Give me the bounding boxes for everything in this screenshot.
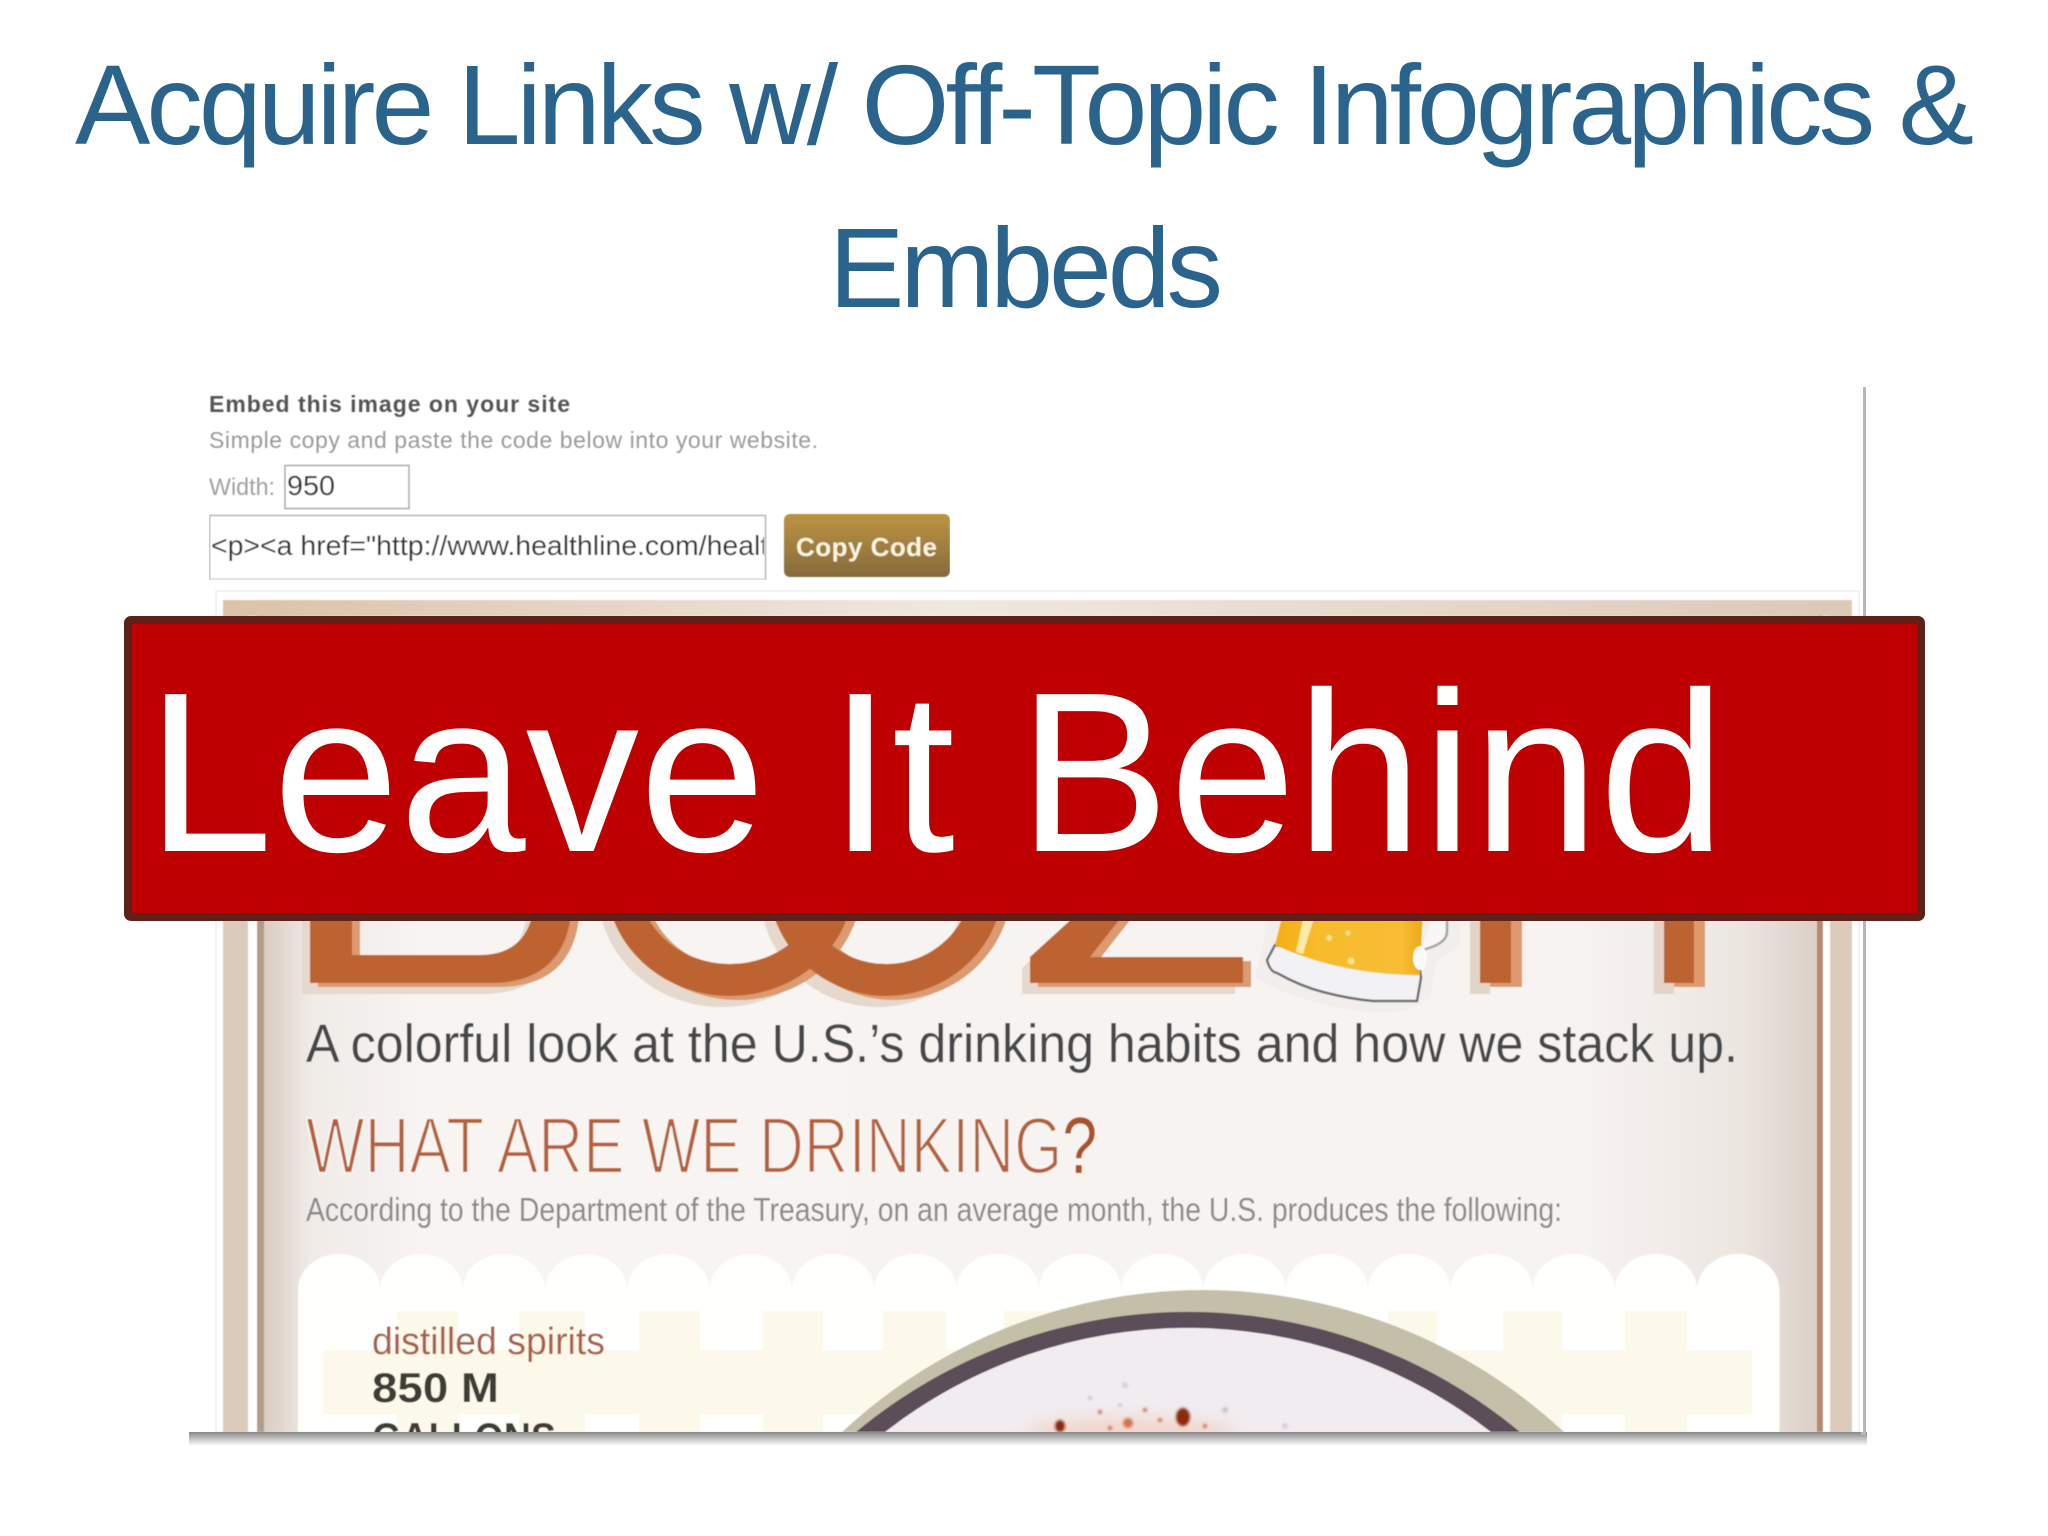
- stat value: 850 M: [372, 1364, 499, 1411]
- right edge shadow: [1861, 387, 1866, 1435]
- button shape: [784, 514, 950, 577]
- banner: leave it behind: [128, 620, 1921, 917]
- foam: [885, 1328, 1491, 1432]
- width input: [285, 466, 409, 508]
- infographic preview: [216, 590, 1860, 1461]
- section heading: WHAT ARE WE DRINKING?: [306, 1101, 1097, 1190]
- input value: 950: [287, 470, 335, 501]
- mug halo: [1255, 915, 1460, 1012]
- beer highlight: [1296, 905, 1318, 954]
- banner text: Leave It Behind: [146, 646, 1726, 900]
- icon: beer mug: [1255, 905, 1460, 1012]
- subtitle: A colorful look at the U.S.’s drinking habits and how we stack up.: [306, 1014, 1738, 1074]
- post fills: [1480, 900, 1694, 983]
- code text: <p><a href="http://www.healthline.com/health/: [211, 530, 792, 561]
- preview paper: [264, 616, 1817, 1432]
- left inner rule: [257, 616, 264, 1432]
- beige offset shadow: [302, 791, 1235, 994]
- panel shadow: [189, 387, 1867, 1446]
- banner box: [128, 620, 1921, 917]
- foam stain: [1025, 1418, 1235, 1446]
- code field: [210, 516, 766, 580]
- preview frame: [216, 590, 1860, 1432]
- outer tan border: [223, 600, 1852, 1432]
- plaid pattern: [323, 1311, 1752, 1432]
- top band: [223, 600, 1580, 616]
- stat label: distilled spirits: [372, 1321, 605, 1363]
- light orange offset: [318, 784, 1251, 987]
- title: [75, 42, 1974, 331]
- bottom shadow: [189, 1432, 1867, 1446]
- beer: [1275, 905, 1423, 975]
- foam specks: [1055, 1382, 1288, 1432]
- embed instruction: Simple copy and paste the code below into your website.: [209, 427, 818, 453]
- vertical bands: [397, 1311, 1687, 1432]
- panel: embed page screenshot: [187, 387, 1863, 1461]
- right inner rule: [1817, 616, 1823, 1432]
- handle knob: [1413, 946, 1427, 970]
- dark inner rim: [856, 1312, 1520, 1432]
- section intro: According to the Department of the Treasury, on an average month, the U.S. produces the following:: [306, 1191, 1562, 1228]
- orange shapes: [310, 780, 1243, 983]
- picket fence: [298, 1254, 1779, 1432]
- post highlights: [1490, 900, 1705, 987]
- glass rim: [842, 1290, 1564, 1432]
- horizontal band: [323, 1350, 1752, 1414]
- embed heading: Embed this image on your site: [209, 391, 570, 417]
- beer bubbles: [1326, 930, 1354, 964]
- title line 1: Acquire Links w/ Off-Topic Infographics &: [75, 42, 1974, 168]
- embed form: [209, 391, 950, 580]
- title artwork fragments: [302, 780, 1251, 994]
- screenshot background: [1861, 387, 1863, 1432]
- input box: [285, 466, 409, 508]
- copy code button: [784, 514, 950, 577]
- width label: Width:: [209, 474, 275, 501]
- beer glass from above: [842, 1290, 1564, 1446]
- spirits stat: [372, 1321, 605, 1461]
- glass base: [1267, 945, 1421, 1001]
- code box: [210, 516, 792, 580]
- stat unit: GALLONS: [372, 1414, 556, 1461]
- title line 2: Embeds: [829, 205, 1223, 331]
- button label: Copy Code: [796, 532, 937, 562]
- mug handle: [1422, 915, 1447, 950]
- posts of title artwork: [1470, 900, 1705, 994]
- post shadows: [1470, 900, 1705, 994]
